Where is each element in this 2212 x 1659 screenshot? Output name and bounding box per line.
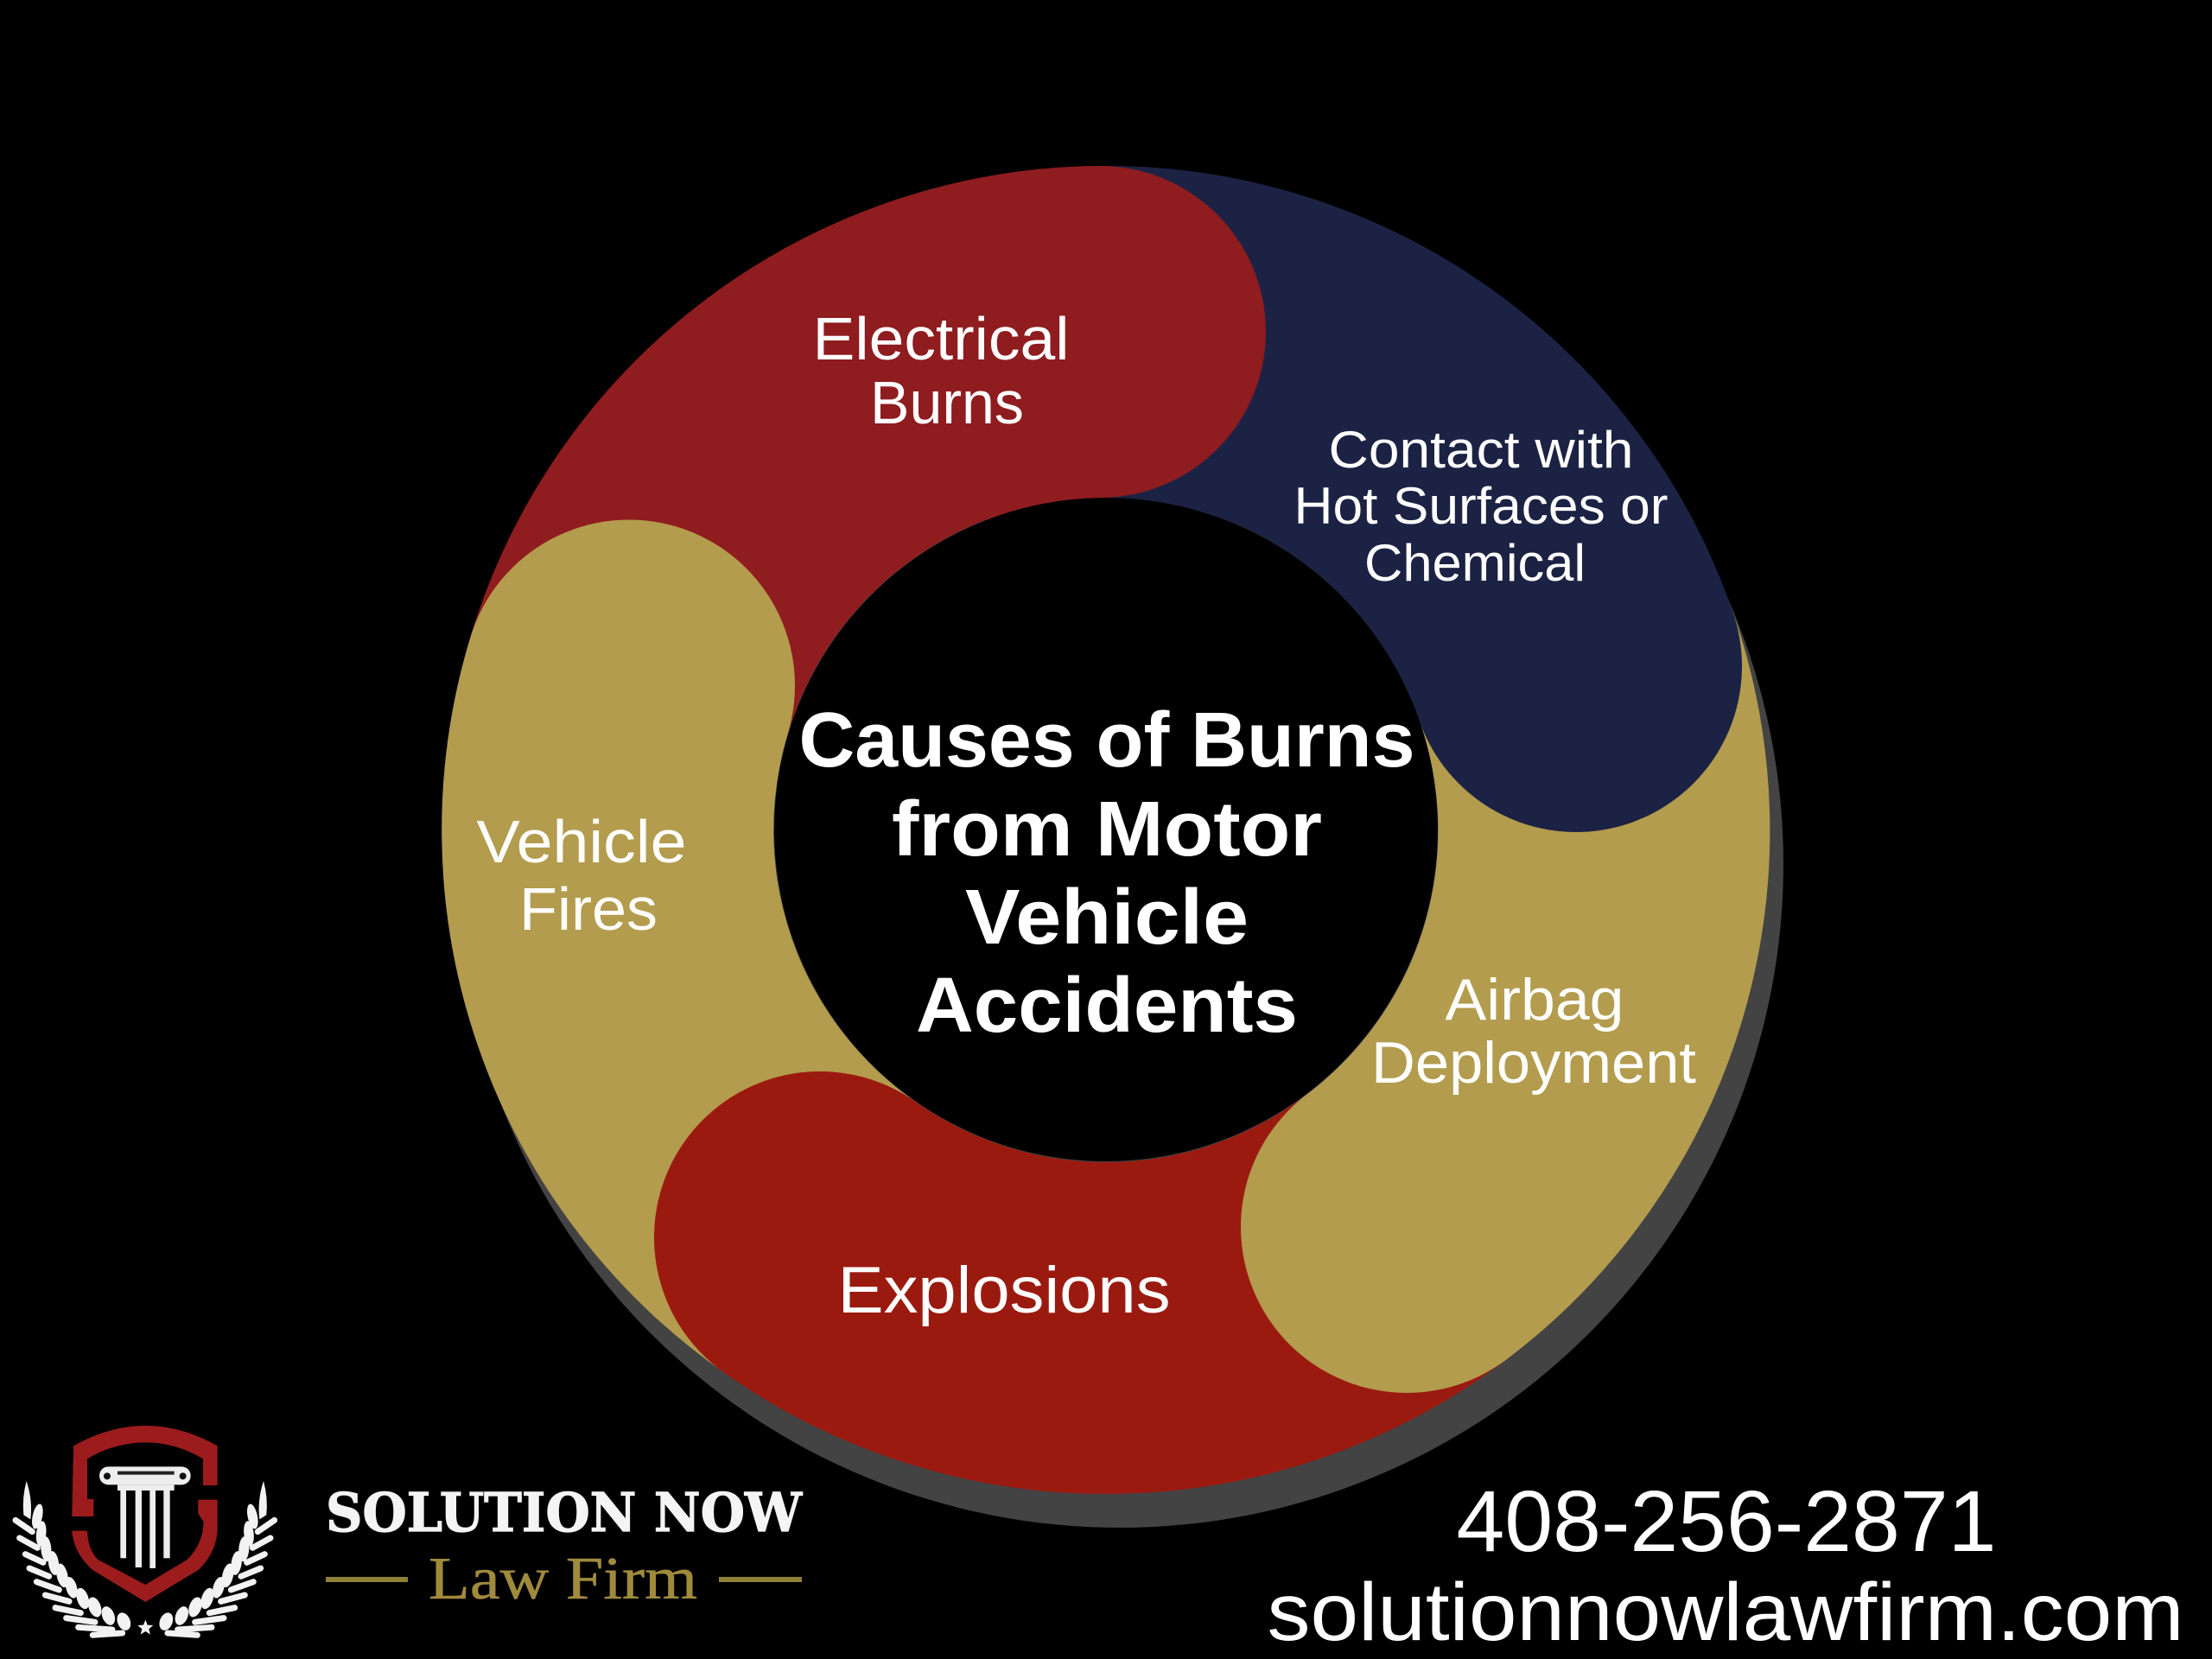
segment: explosions (820, 1227, 1407, 1328)
title: Vehicle (965, 874, 1249, 961)
shield upper (72, 1426, 218, 1516)
star (137, 1620, 153, 1635)
segment: electrical burns head (936, 332, 1100, 362)
label: contact with hot surfaces or chemical: Contact with (1329, 421, 1633, 479)
label: airbag deployment (1371, 967, 1696, 1096)
logo emblem (16, 1426, 275, 1635)
label: vehicle fires: Fires (519, 875, 658, 943)
logo wordmark: law firm (326, 1546, 802, 1612)
center disc (774, 498, 1438, 1161)
label: airbag deployment: Airbag (1445, 967, 1624, 1033)
title: Causes of Burns (798, 697, 1415, 784)
segment: airbag deployment (1407, 666, 1604, 1227)
phone number: 408-256-2871 (1457, 1473, 1996, 1570)
title (798, 697, 1415, 1049)
label: explosions: Explosions (838, 1254, 1170, 1327)
right laurel (157, 1481, 275, 1635)
ring diagram (456, 200, 1783, 1528)
label: electrical burns: Burns (870, 369, 1024, 436)
label: vehicle fires (477, 808, 686, 943)
segment: electrical burns body (629, 332, 1100, 686)
column (99, 1466, 191, 1568)
logo wordmark: law firm: Law Firm (429, 1546, 697, 1612)
label: contact with hot surfaces or chemical (1294, 421, 1668, 592)
label: contact with hot surfaces or chemical: Chemical (1364, 534, 1586, 592)
label: vehicle fires: Vehicle (477, 808, 686, 875)
label: airbag deployment: Deployment (1371, 1030, 1696, 1096)
title: from Motor (892, 786, 1322, 873)
website: solutionnowlawfirm.com (1267, 1567, 2184, 1658)
segment: vehicle fires (607, 686, 820, 1237)
label: electrical burns (812, 305, 1070, 436)
shield lower (72, 1500, 218, 1602)
ring drop shadow (456, 200, 1783, 1528)
label: contact with hot surfaces or chemical: Hot Surfaces or (1294, 477, 1668, 535)
title: Accidents (916, 963, 1298, 1049)
logo wordmark: solution now: SOLUTION NOW (326, 1481, 803, 1544)
label: electrical burns: Electrical (812, 305, 1070, 372)
segment: contact with hot surfaces (1100, 332, 1576, 666)
left laurel (16, 1481, 133, 1635)
